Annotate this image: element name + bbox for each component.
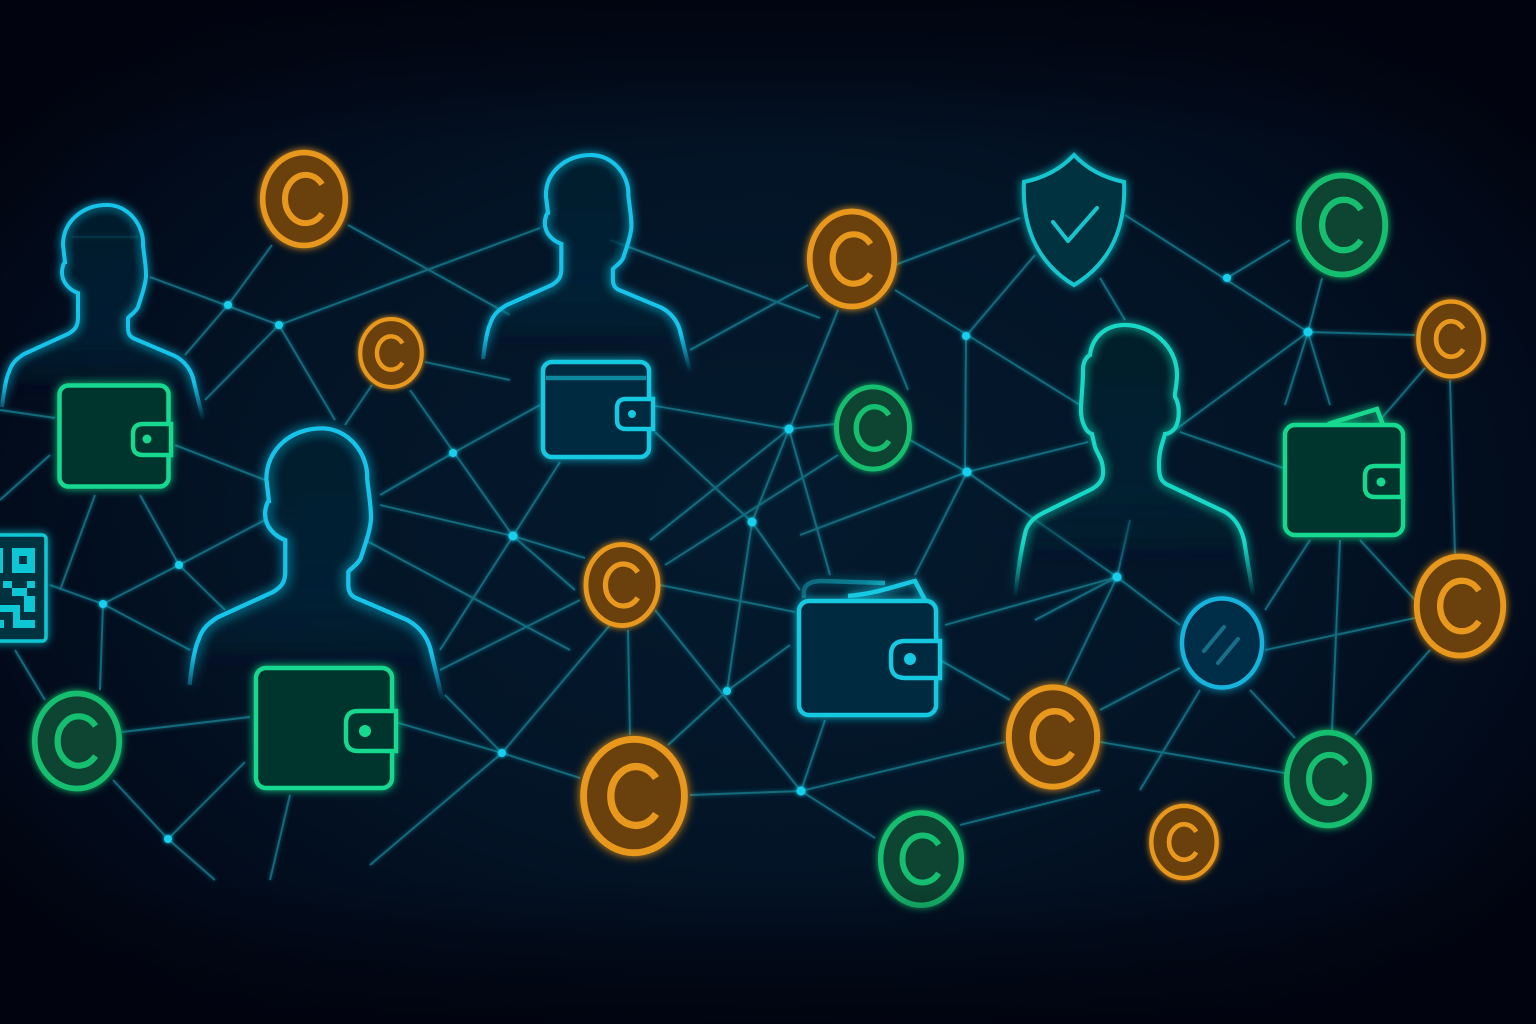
wallet: top left green [60, 386, 171, 486]
coin: orange middle [586, 544, 658, 626]
coin: green bottom centre [881, 813, 961, 905]
coin: orange large bottom [584, 739, 684, 853]
wallet: centre blue [799, 581, 940, 715]
coin: orange bottom centre right [1009, 687, 1097, 787]
person: lower left [190, 428, 443, 701]
coin: green bottom right [1287, 733, 1369, 825]
coin: green top right [1299, 176, 1385, 274]
icon: shield with check [1024, 155, 1124, 285]
coin: green lower left [35, 693, 119, 789]
network connection lines [0, 215, 1455, 880]
wallet: top centre cyan [543, 362, 653, 457]
coin: orange top left [263, 153, 345, 245]
wallet: lower left green [256, 668, 396, 788]
person: top left [2, 205, 203, 420]
icon: QR code [0, 535, 46, 641]
coin: orange top centre [810, 211, 894, 307]
wallet: right green [1285, 409, 1403, 535]
person: top centre [483, 155, 690, 372]
coin: green centre [837, 387, 909, 469]
coin: orange far right [1417, 556, 1503, 656]
coin: blue with slashes [1182, 598, 1262, 688]
coin: orange right small [1418, 302, 1484, 376]
coin: orange small left [360, 319, 422, 387]
person: right [1015, 325, 1253, 597]
coin: orange small bottom [1151, 806, 1217, 878]
network nodes [99, 274, 1312, 843]
